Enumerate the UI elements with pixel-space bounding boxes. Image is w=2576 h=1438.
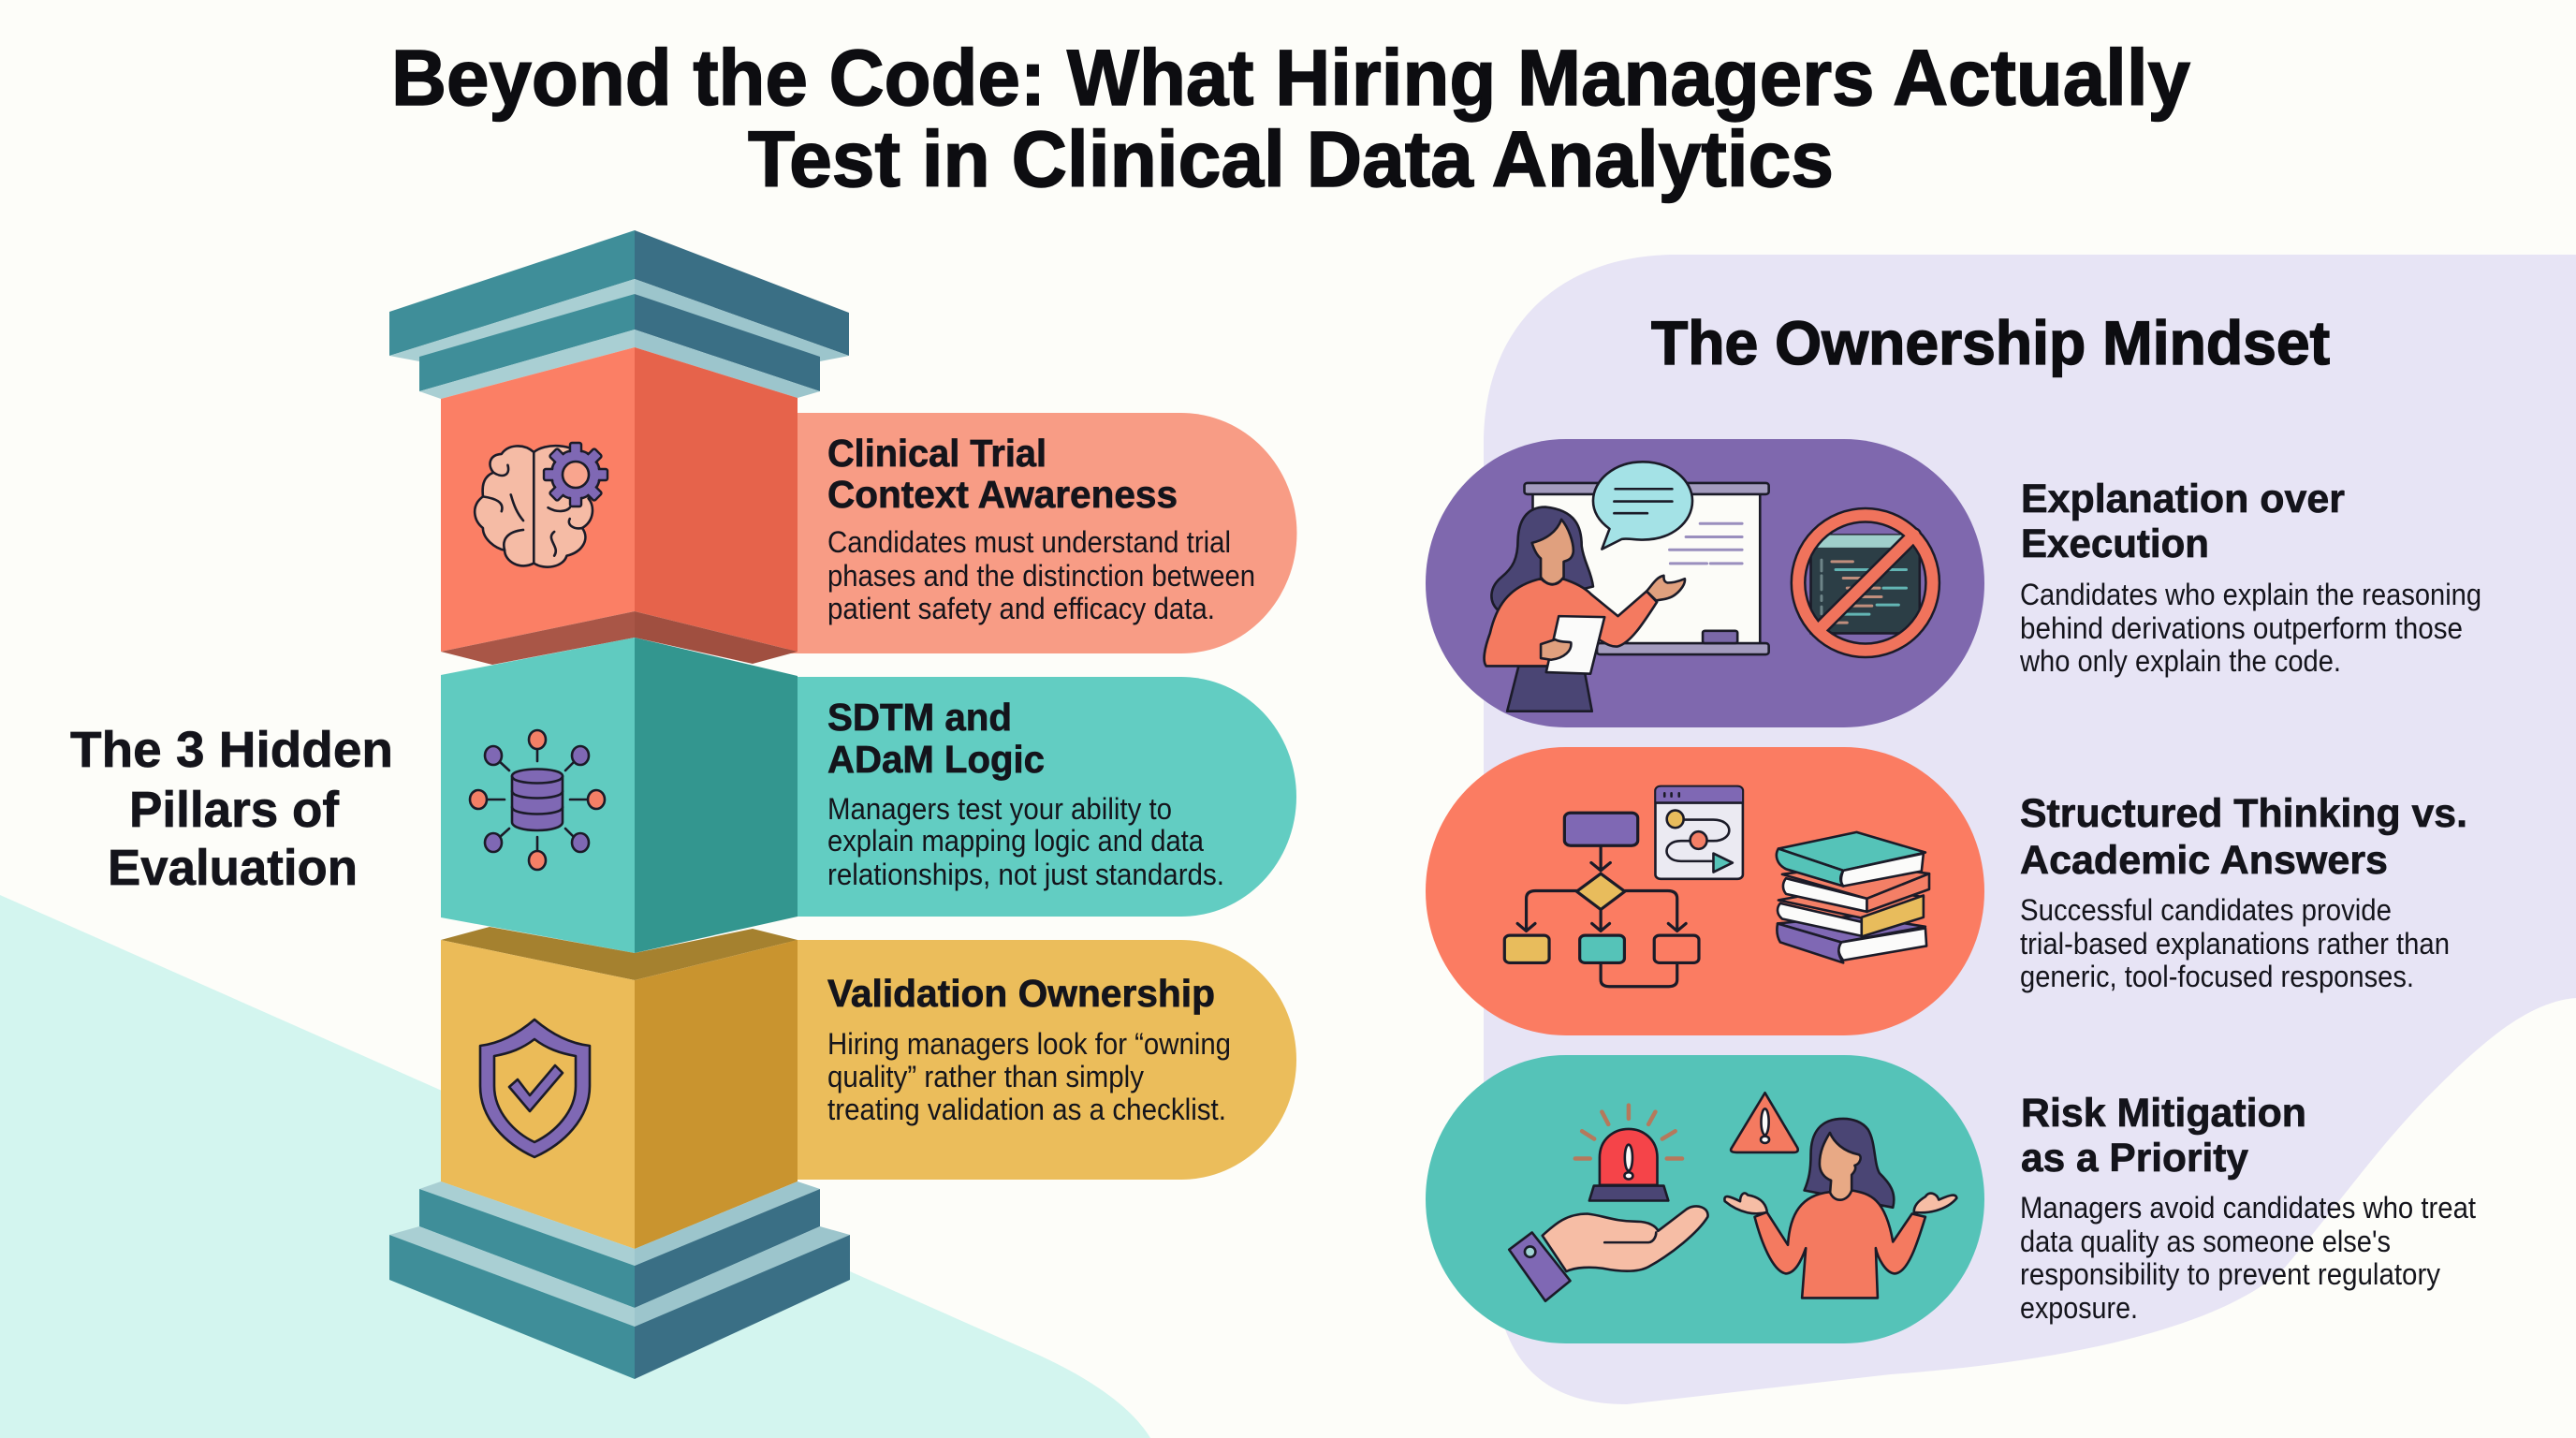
text: risk mitigation as a priority: as a Priority [2021, 1136, 2248, 1181]
panel: clinical trial context awareness: Context Awareness [827, 473, 1178, 516]
panel: sdtm and adam logic: Managers test your ability to [827, 792, 1172, 826]
panel: clinical trial context awareness [786, 413, 1296, 653]
text: risk mitigation as a priority [2020, 1091, 2476, 1325]
alarm beacon [1575, 1106, 1682, 1201]
panel: validation ownership: quality” rather than simply [827, 1060, 1144, 1093]
heading: the 3 hidden pillars of evaluation: The 3 Hidden [70, 722, 393, 778]
icon: brain with gear [475, 443, 607, 567]
icon: shield with check [480, 1020, 590, 1157]
text: risk mitigation as a priority: responsibility to prevent regulatory [2020, 1257, 2440, 1291]
pillar: teal block [441, 638, 798, 953]
panel: risk mitigation illustration [1426, 1055, 1984, 1343]
text: explanation over execution: who only explain the code. [2019, 644, 2341, 678]
whiteboard [1525, 483, 1769, 654]
text: risk mitigation as a priority: data quality as someone else's [2020, 1225, 2391, 1258]
text: explanation over execution: Candidates who explain the reasoning [2020, 578, 2481, 611]
text: explanation over execution: Explanation over [2021, 477, 2345, 521]
panel: sdtm and adam logic: ADaM Logic [827, 738, 1045, 781]
panel: sdtm and adam logic [786, 677, 1296, 917]
speech bubble [1593, 462, 1692, 550]
stacked books [1777, 832, 1929, 962]
pillar: coral block [441, 347, 798, 665]
text: risk mitigation as a priority: Managers avoid candidates who treat [2020, 1191, 2476, 1225]
icon: database network [470, 730, 605, 870]
text: structured thinking vs academic answers: generic, tool-focused responses. [2020, 960, 2414, 993]
text: structured thinking vs academic answers: Successful candidates provide [2020, 893, 2392, 927]
text: explanation over execution [2019, 477, 2481, 678]
text: explanation over execution: behind derivations outperform those [2020, 611, 2463, 645]
panel: explanation illustration [1426, 439, 1984, 727]
pillar: yellow block [441, 927, 798, 1249]
title [391, 34, 2190, 203]
panel: clinical trial context awareness: phases and the distinction between [827, 559, 1255, 593]
heading: the 3 hidden pillars of evaluation: Evaluation [108, 840, 358, 896]
text: structured thinking vs academic answers [2020, 791, 2467, 993]
heading: the 3 hidden pillars of evaluation: Pillars of [129, 782, 340, 838]
pillar: base [389, 1181, 850, 1379]
panel: validation ownership: Validation Ownership [827, 972, 1215, 1015]
panel: structured thinking illustration [1426, 747, 1984, 1035]
shrugging woman [1724, 1119, 1956, 1298]
panel: validation ownership [786, 940, 1296, 1180]
panel: sdtm and adam logic: SDTM and [827, 696, 1012, 739]
no code sign [1798, 515, 1933, 651]
panel: sdtm and adam logic: relationships, not just standards. [827, 858, 1224, 891]
panel: sdtm and adam logic: explain mapping logic and data [827, 824, 1204, 858]
text: structured thinking vs academic answers: trial-based explanations rather than [2020, 927, 2450, 961]
open hand [1509, 1206, 1708, 1301]
panel: clinical trial context awareness: Clinical Trial [827, 432, 1046, 475]
text: structured thinking vs academic answers: Academic Answers [2020, 838, 2388, 883]
heading: the ownership mindset: The Ownership Mindset [1651, 308, 2330, 377]
panel: clinical trial context awareness: Candidates must understand trial [827, 525, 1231, 559]
title: Test in Clinical Data Analytics [748, 115, 1834, 203]
text: risk mitigation as a priority: exposure. [2020, 1291, 2138, 1325]
presenter [1485, 507, 1685, 712]
panel: validation ownership: Hiring managers look for “owning [827, 1027, 1231, 1061]
title: Beyond the Code: What Hiring Managers Actually [391, 34, 2190, 122]
flowchart [1504, 813, 1699, 987]
pillar: capital [389, 230, 849, 399]
panel: clinical trial context awareness: patient safety and efficacy data. [827, 592, 1215, 625]
text: explanation over execution: Execution [2021, 521, 2209, 566]
text: risk mitigation as a priority: Risk Mitigation [2021, 1091, 2306, 1136]
process window [1655, 786, 1743, 879]
text: structured thinking vs academic answers: Structured Thinking vs. [2020, 791, 2467, 836]
heading: the 3 hidden pillars of evaluation [70, 722, 393, 896]
panel: validation ownership: treating validation as a checklist. [827, 1093, 1226, 1126]
warning triangle [1731, 1093, 1798, 1152]
